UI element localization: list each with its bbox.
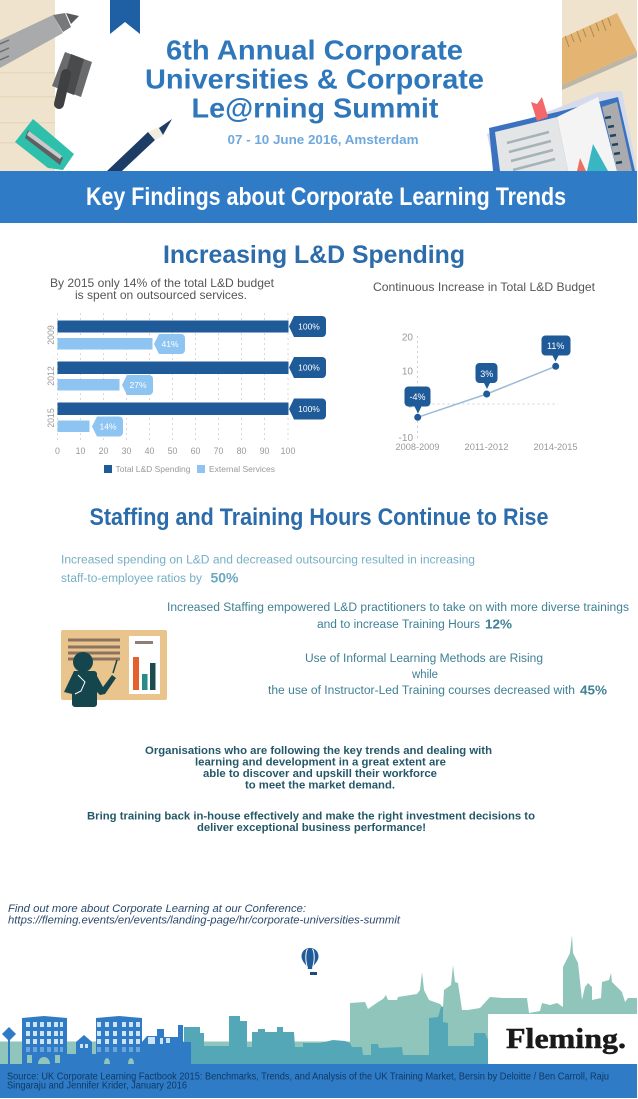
text: informal learning: the use of Instructor-Led Training courses decreased with [268,685,575,697]
line chart: 20 [402,332,413,344]
closing statement: deliver exceptional business performance! [197,822,426,834]
near buildings [2,1016,191,1065]
text: increased spending [61,554,475,586]
line chart: -4% [409,392,426,402]
line chart: 2014-2015 [534,442,578,452]
link text: https://fleming.events/en/events/landing-page/hr/corporate-universities-summit [8,914,401,926]
icon: balloon [302,948,318,975]
value tags: 14% [99,422,117,432]
line chart: 2011-2012 [464,442,508,452]
heading: spending: Increasing L&D Spending [163,241,465,269]
bar chart caption: By 2015 only 14% of the total L&D budget [50,276,275,290]
line chart: 2008-2009 [396,442,440,452]
banner [0,171,637,223]
axis labels: 0 [55,446,60,456]
link text: Find out more about Corporate Learning at our Conference: [8,903,306,915]
title: 6th Annual Corporate [166,34,463,66]
text: increased staffing: Increased Staffing empowered L&D practitioners to take on with more diverse trainings [167,602,629,614]
value tags [92,316,326,436]
bar chart caption: is spent on outsourced services. [75,288,247,302]
Fleming logo: Fleming. [506,1023,626,1055]
legend [104,465,275,474]
icon: teacher at board [61,630,167,707]
axis labels: 10 [76,446,85,456]
axis labels: 70 [214,446,223,456]
value tags: 100% [298,362,320,372]
axis labels [46,325,295,456]
closing statement: to meet the market demand. [245,780,395,792]
text: increased staffing [167,602,629,632]
mid skyline [184,1007,488,1064]
closing statement: Organisations who are following the key trends and dealing with [145,745,492,757]
footer source band: Singaraju and Jennifer Krider, January 2016 [7,1080,187,1092]
line chart: 10 [402,366,413,378]
header illustration: right desk with ruler and book [487,0,637,171]
banner: Key Findings about Corporate Learning Trends [86,183,566,211]
bar chart [46,313,326,474]
Fleming logo [488,1014,638,1065]
skyline [0,935,637,1065]
axis labels: 2009 [46,325,56,345]
line chart: 0 [407,400,413,410]
axis labels: 80 [237,446,246,456]
value tags: 27% [129,380,147,390]
text: increased spending: 50% [210,570,238,586]
date line: 07 - 10 June 2016, Amsterdam [228,132,418,147]
axis labels: 50 [168,446,177,456]
line chart caption: Continuous Increase in Total L&D Budget [373,280,596,294]
text: increased spending: staff-to-employee ratios by [61,573,202,585]
heading: staffing: Staffing and Training Hours Continue to Rise [90,504,548,531]
icon: bookmark ribbon [110,0,140,34]
closing statement [87,745,535,834]
axis labels: 2015 [46,408,56,428]
title: Universities & Corporate [145,64,484,94]
far skyline [0,935,637,1064]
icon: pencil [107,119,172,171]
title [145,34,484,124]
footer source band [0,1064,637,1098]
value tags: 100% [298,322,320,332]
axis labels: 30 [122,446,131,456]
text: informal learning: while [411,669,438,681]
axis labels: 100 [281,446,295,456]
value tags: 100% [298,404,320,414]
axis labels: 90 [260,446,269,456]
axis labels: 60 [191,446,200,456]
link text [8,903,401,926]
text: increased staffing: and to increase Training Hours [317,619,480,631]
text: informal learning [268,653,607,698]
legend: External Services [209,465,275,474]
axis labels: 2012 [46,366,56,386]
title: Le@rning Summit [192,92,438,124]
line chart [396,332,578,452]
line chart: 3% [480,369,493,379]
text: informal learning: Use of Informal Learning Methods are Rising [305,653,543,665]
header illustration: left desk with pens and sharpener [0,0,92,171]
bar chart caption [50,276,275,302]
text: informal learning: 45% [580,682,607,698]
line chart: -10 [399,433,413,444]
closing statement: able to discover and upskill their workforce [203,768,437,780]
closing statement: Bring training back in-house effectively and make the right investment decisions to [87,810,535,822]
text: increased spending: Increased spending on L&D and decreased outsourcing resulted in increasing [61,554,475,566]
axis labels: 40 [145,446,154,456]
text: increased staffing: 12% [485,616,512,632]
closing statement: learning and development in a great extent are [195,756,446,768]
legend: Total L&D Spending [116,465,190,474]
line chart: 11% [547,341,564,351]
value tags: 41% [161,339,179,349]
axis labels: 20 [99,446,108,456]
